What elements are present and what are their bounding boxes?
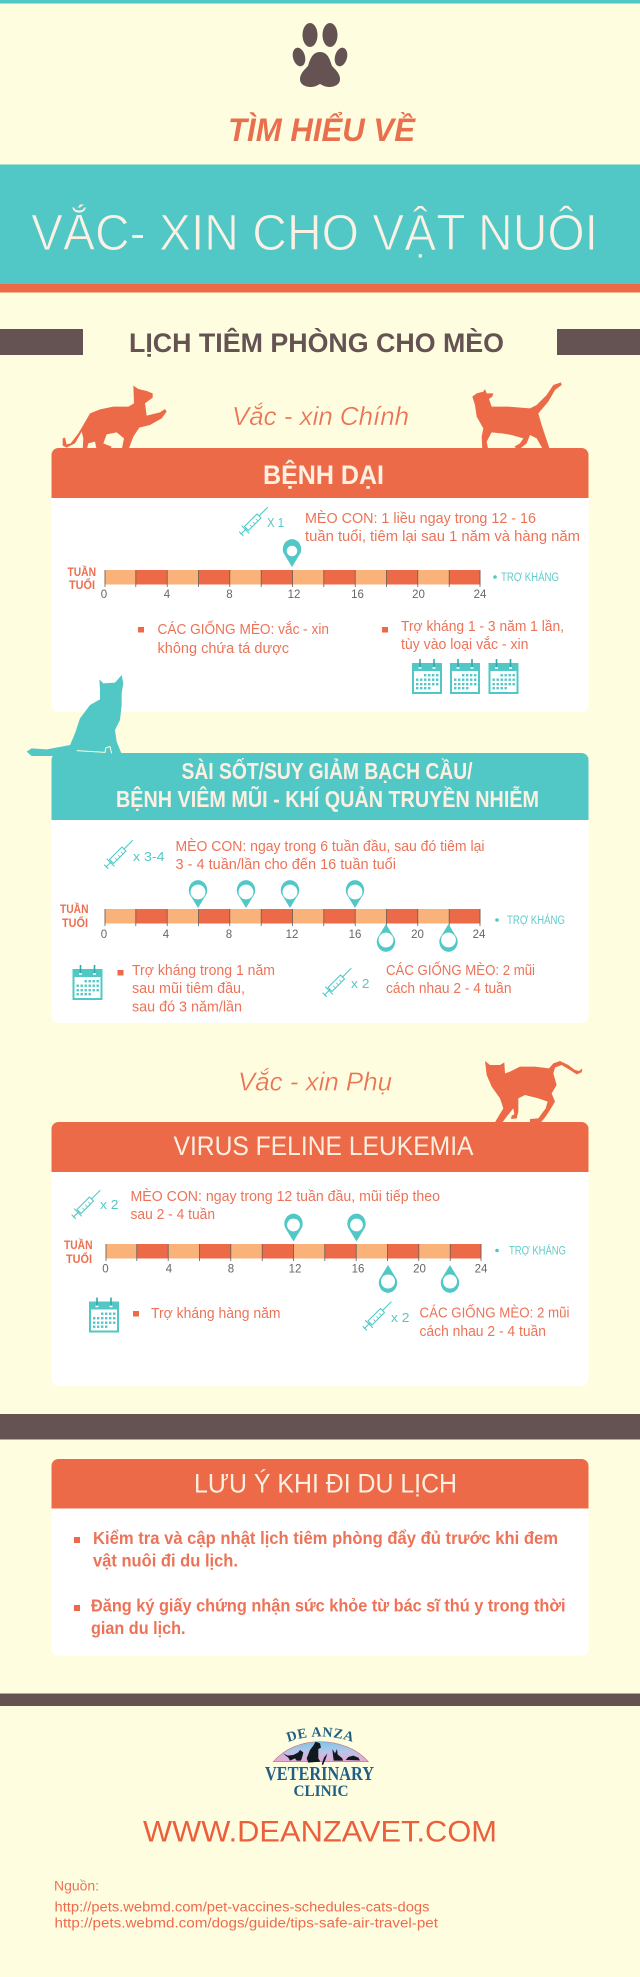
note one: vật nuôi đi du lịch. [93,1550,238,1570]
timeline [106,1244,482,1261]
note one [93,1528,558,1570]
immunity note [132,963,275,1016]
timeline numbers: 8 [226,929,232,941]
banner [0,164,640,292]
note two [91,1596,566,1638]
icon: syringe [240,508,268,536]
icon: syringe [323,968,351,996]
divider bar [0,1414,640,1440]
kitten note: sau 2 - 4 tuần [130,1207,215,1223]
dose count: X 1 [267,515,284,530]
immunity note: Trợ kháng hàng năm [151,1306,280,1322]
kitten note: 3 - 4 tuần/lần cho đến 16 tuần tuổi [176,857,396,873]
website: WWW.DEANZAVET.COM [143,1816,497,1848]
section bar right [557,329,640,355]
breeds note [386,961,535,997]
icon: syringe [104,840,132,868]
breeds note: CÁC GIỐNG MÈO: 2 mũi [420,1304,570,1322]
timeline numbers: 16 [351,589,364,601]
timeline label: TUẦN [64,1239,92,1252]
timeline [104,570,480,587]
sources [54,1878,438,1930]
icon: lower pin [439,924,458,952]
icon: lower pin [379,1265,397,1293]
panel: sài sốt [52,753,588,1023]
panel: virus feline leukemia [52,1122,588,1386]
kitten note: tuần tuổi, tiêm lại sau 1 năm và hàng năm [305,529,580,545]
legend: TRỢ KHÁNG [509,1244,566,1258]
kitten note: MÈO CON: ngay trong 12 tuần đầu, mũi tiếp theo [130,1188,440,1205]
breeds note: cách nhau 2 - 4 tuần [420,1324,546,1340]
kitten note: MÈO CON: 1 liều ngay trong 12 - 16 [305,510,536,527]
timeline numbers: 24 [475,1264,488,1276]
icon: syringe [72,1190,100,1218]
timeline label: TUỔI [66,1253,92,1266]
timeline numbers: 0 [101,589,107,601]
bullet [118,970,124,976]
note one: Kiểm tra và cập nhật lịch tiêm phòng đẩy đủ trước khi đem [93,1528,558,1548]
timeline numbers: 4 [164,589,171,601]
timeline numbers: 12 [286,929,298,941]
timeline label: TUẦN [60,903,88,916]
immunity note: Trợ kháng trong 1 năm [132,963,275,979]
timeline label [68,566,96,592]
timeline numbers: 0 [101,929,107,941]
timeline numbers [101,589,487,601]
timeline numbers: 24 [473,929,486,941]
breeds note: cách nhau 2 - 4 tuần [386,981,512,997]
breeds note: CÁC GIỐNG MÈO: 2 mũi [386,961,535,979]
dose count: x 2 [391,1310,410,1325]
timeline numbers: 12 [288,589,300,601]
timeline numbers: 8 [226,589,233,601]
icon: paw print [291,23,349,87]
panel title: BỆNH DẠI [263,459,384,490]
sources: Nguồn: [54,1878,99,1894]
divider bar [0,1694,640,1706]
timeline numbers: 16 [349,929,361,941]
dose count: x 3-4 [133,849,164,864]
immunity note: tùy vào loại vắc - xin [401,636,528,653]
panel title: SÀI SỐT/SUY GIẢM BẠCH CẦU/ [182,756,473,784]
icon: pin at week 12 [283,539,301,567]
timeline label: TUỔI [69,579,95,592]
immunity note: sau đó 3 năm/lần [132,1000,242,1016]
logo: De Anza Veterinary Clinic [265,1727,374,1800]
timeline label [64,1239,92,1266]
icon: pin at week 9 [237,880,255,908]
icon: teal cat [27,675,123,756]
icon: pin at week 12 [284,1214,303,1242]
legend: TRỢ KHÁNG [501,571,559,584]
bullet [133,1311,139,1316]
breeds note [420,1304,570,1340]
bullet [138,627,144,632]
icon: calendar [89,1298,119,1332]
timeline numbers [102,1264,488,1276]
bullet [74,1537,80,1543]
panel title [116,756,539,812]
timeline numbers: 20 [412,589,425,601]
logo: De Anza Veterinary Clinic: VETERINARY [265,1763,374,1785]
icon: orange cat arched [485,1061,582,1123]
icon: calendars [412,659,518,694]
panel header [52,1122,588,1172]
subheading: vắc-xin chính: Vắc - xin Chính [232,401,409,431]
immunity note [401,619,564,653]
timeline label: TUỔI [62,917,88,930]
panel title: BỆNH VIÊM MŨI - KHÍ QUẢN TRUYỀN NHIỄM [116,784,539,812]
bullet [74,1605,80,1611]
timeline numbers: 4 [166,1264,173,1276]
sources: http://pets.webmd.com/pet-vaccines-schedules-cats-dogs [54,1900,430,1914]
timeline numbers: 0 [102,1264,109,1276]
title: VẮC- XIN CHO VẬT NUÔI [31,203,598,261]
legend [495,914,565,927]
subheading: vắc-xin phụ: Vắc - xin Phụ [238,1066,392,1096]
timeline numbers: 16 [352,1264,364,1276]
icon: pin at week 16 [347,1214,366,1242]
panel header [52,448,588,498]
panel title: VIRUS FELINE LEUKEMIA [174,1131,474,1161]
kitten note [130,1188,440,1223]
icon: calendar [72,965,102,1000]
icon: orange cat right [472,382,562,450]
sources: http://pets.webmd.com/dogs/guide/tips-safe-air-travel-pet [54,1916,438,1930]
timeline numbers: 12 [289,1264,301,1276]
timeline label: TUẦN [68,566,96,579]
icon: lower pin [377,924,395,952]
top teal strip [0,0,640,4]
heading: lịch tiêm phòng cho mèo: LỊCH TIÊM PHÒNG CHO MÈO [129,327,504,358]
panel: travel notes [52,1459,588,1656]
breeds note [158,620,329,657]
icon: pin at week 16 [346,880,364,908]
timeline numbers: 20 [413,1264,426,1276]
timeline numbers: 8 [228,1264,234,1276]
panel header [52,1459,588,1508]
logo: De Anza Veterinary Clinic: CLINIC [294,1783,348,1800]
panel title: LƯU Ý KHI ĐI DU LỊCH [194,1468,457,1498]
legend [495,1244,566,1258]
heading: tìm hiểu về: TÌM HIỂU VỀ [228,112,417,148]
icon: syringe [363,1302,391,1330]
dose count: x 2 [351,976,370,991]
icon: pin at week 6 [189,880,207,908]
kitten note: MÈO CON: ngay trong 6 tuần đầu, sau đó tiêm lại [176,838,484,855]
timeline numbers: 20 [411,929,424,941]
dose count: x 2 [100,1197,118,1212]
timeline numbers: 24 [474,589,487,601]
note two: Đăng ký giấy chứng nhận sức khỏe từ bác sĩ thú y trong thời [91,1596,566,1616]
immunity note: sau mũi tiêm đầu, [132,981,245,997]
breeds note: CÁC GIỐNG MÈO: vắc - xin [158,620,329,638]
note two: gian du lịch. [91,1618,186,1638]
logo: De Anza Veterinary Clinic: DE ANZA [286,1727,352,1742]
panel header [52,753,588,820]
timeline label [60,903,88,930]
immunity note: Trợ kháng 1 - 3 năm 1 lần, [401,619,564,635]
breeds note: không chứa tá dược [158,641,289,657]
timeline numbers [101,929,486,941]
icon: orange cat left [63,386,167,450]
kitten note [176,838,484,873]
icon: lower pin [441,1265,459,1293]
section bar left [0,329,83,355]
icon: pin at week 12 [281,880,299,908]
timeline numbers: 4 [163,929,170,941]
bullet [382,627,388,632]
timeline [104,909,480,926]
panel: bệnh dại [52,448,588,712]
kitten note [305,510,580,545]
legend: TRỢ KHÁNG [507,914,565,927]
